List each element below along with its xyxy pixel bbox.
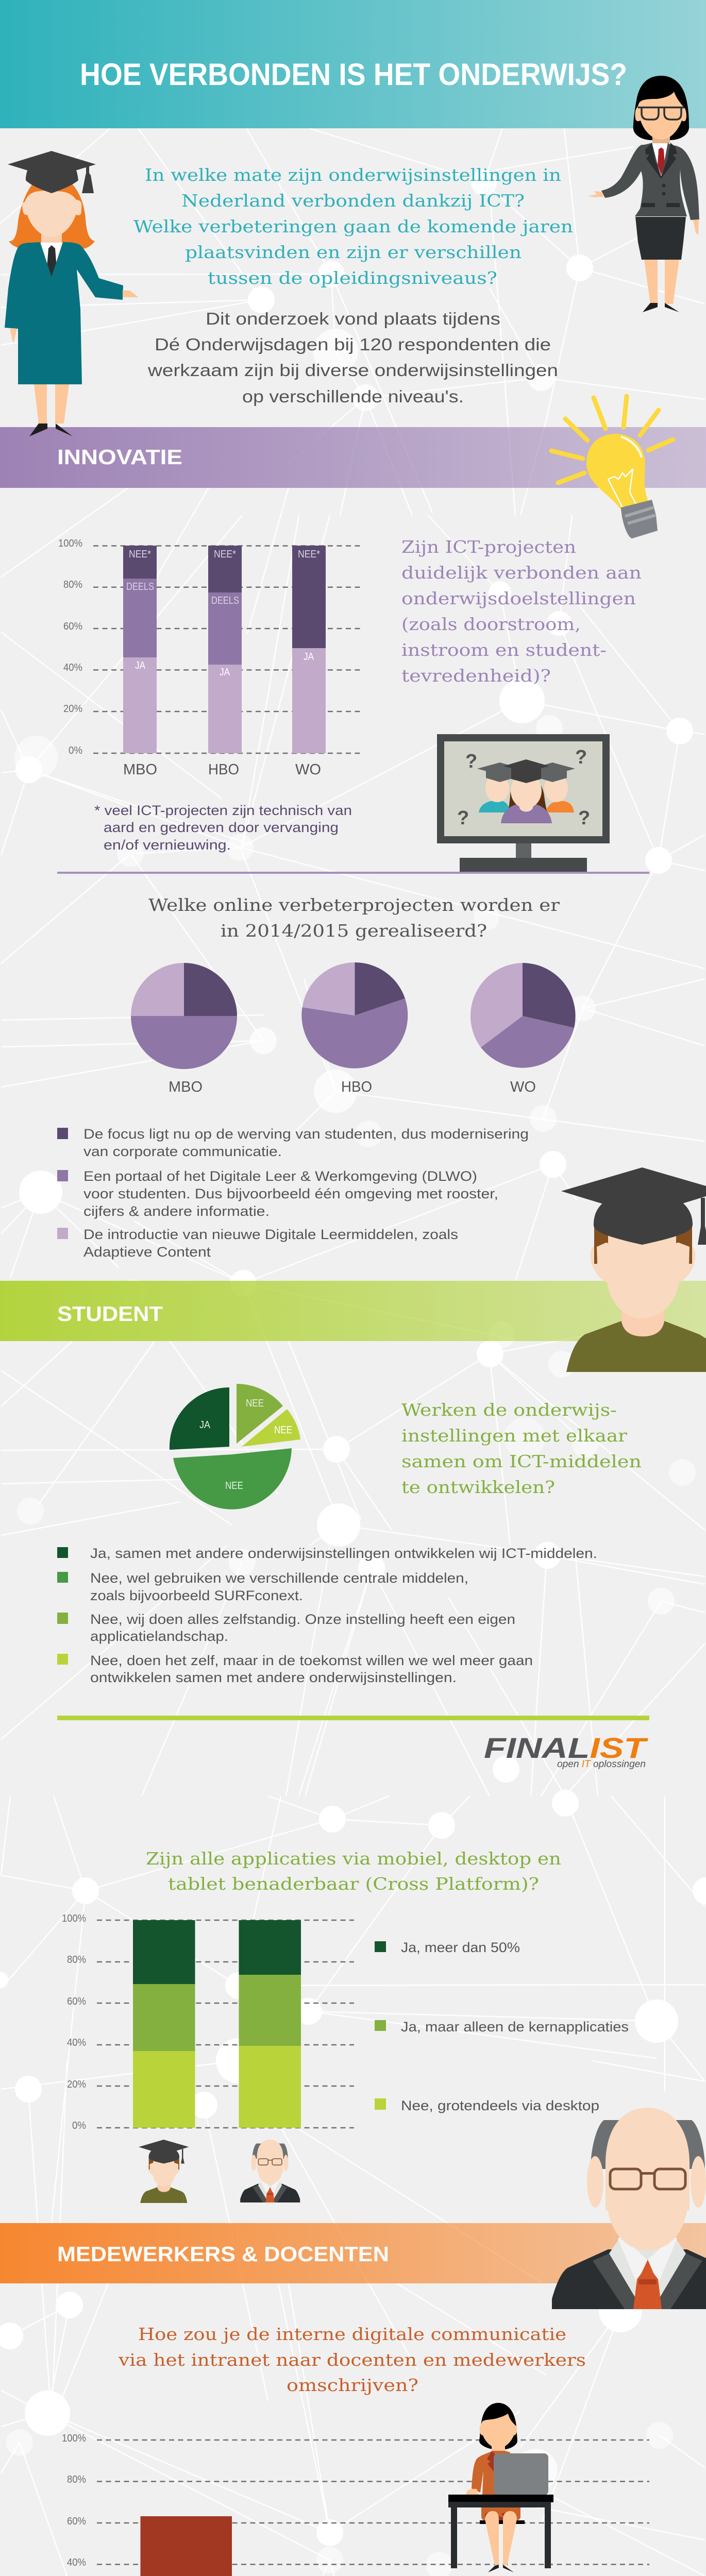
- bar chart: intranet: 80%: [67, 2474, 86, 2485]
- section band: student: STUDENT: [57, 1302, 163, 1326]
- question: intranet: Hoe zou je de interne digitale communicatie: [138, 2324, 566, 2344]
- bar chart: intranet: 60%: [67, 2516, 86, 2527]
- icon: monitor with students: ?: [578, 807, 590, 829]
- bar chart: intranet: 40%: [67, 2557, 86, 2568]
- intro description text: [147, 309, 558, 406]
- bar: WO: NEE*: [298, 549, 320, 560]
- question: cross platform: [146, 1849, 561, 1894]
- header banner: [0, 0, 706, 128]
- bar chart: ICT-projecten: MBO: [123, 761, 157, 778]
- intro question text: tussen de opleidingsniveaus?: [208, 268, 497, 288]
- bar chart: cross platform: 0%: [72, 2120, 86, 2131]
- question: samenwerking: samen om ICT-middelen: [401, 1451, 642, 1471]
- legend: verbeterprojecten: cijfers & andere informatie.: [83, 1204, 270, 1219]
- question: samenwerking: instellingen met elkaar: [401, 1426, 627, 1446]
- pie: WO: WO: [510, 1079, 536, 1095]
- bar: MBO: NEE*: [129, 549, 151, 560]
- icon: graduate woman: [5, 151, 139, 436]
- question: samenwerking: [401, 1400, 642, 1497]
- legend: samenwerking: Ja, samen met andere onderwijsinstellingen ontwikkelen wij ICT-middelen.: [90, 1546, 597, 1561]
- bar: HBO: NEE*: [214, 549, 236, 560]
- footnote: en/of vernieuwing.: [104, 837, 231, 853]
- icon: professor: [552, 2108, 706, 2309]
- bar: HBO: JA: [220, 667, 230, 678]
- legend: verbeterprojecten: De focus ligt nu op de werving van studenten, dus modernisering: [83, 1126, 529, 1142]
- section band: student: [0, 1281, 706, 1341]
- legend: cross platform: Nee, grotendeels via desktop: [401, 2098, 599, 2113]
- heading: online verbeterprojecten: in 2014/2015 gerealiseerd?: [221, 921, 487, 941]
- footnote: aard en gedreven door vervanging: [104, 820, 339, 835]
- bar chart: ICT-projecten: 60%: [63, 621, 82, 632]
- icon: woman at desk: [448, 2403, 553, 2572]
- intro description text: Dit onderzoek vond plaats tijdens: [206, 309, 500, 328]
- bar: MBO: DEELS: [126, 581, 154, 592]
- question: ICT-projecten doelstellingen: (zoals doorstroom,: [401, 614, 581, 634]
- icon: monitor with students: [437, 734, 610, 872]
- intro description text: op verschillende niveau's.: [242, 387, 464, 406]
- icon: teacher woman: [588, 76, 699, 312]
- question: ICT-projecten doelstellingen: onderwijsdoelstellingen: [401, 588, 636, 608]
- section band: medewerkers en docenten: [0, 2223, 706, 2283]
- question: intranet: via het intranet naar docenten en medewerkers: [118, 2350, 586, 2370]
- legend: verbeterprojecten: voor studenten. Dus bijvoorbeeld één omgeving met rooster,: [83, 1186, 498, 1201]
- bar: moderne DLWO: [140, 2516, 232, 2576]
- section band: innovatie: INNOVATIE: [57, 445, 182, 469]
- bar chart: cross platform: 20%: [67, 2079, 86, 2090]
- icon: monitor with students: ?: [465, 751, 477, 772]
- pie: samenwerking: NEE: [246, 1398, 264, 1409]
- pie: MBO: [131, 963, 237, 1095]
- bar chart: intranet: 100%: [62, 2433, 86, 2444]
- icon: monitor with students: ?: [457, 807, 469, 829]
- bar: WO: JA: [304, 651, 314, 663]
- bar: studenten: [133, 1920, 195, 2128]
- pie: WO: [470, 963, 576, 1095]
- bar chart: ICT-projecten: 0%: [69, 745, 82, 756]
- question: ICT-projecten doelstellingen: tevredenheid)?: [401, 666, 551, 686]
- bar: MBO: [123, 546, 157, 753]
- legend: samenwerking: applicatielandschap.: [90, 1629, 228, 1644]
- question: ICT-projecten doelstellingen: instroom en student-: [401, 640, 607, 660]
- question: ICT-projecten doelstellingen: duidelijk verbonden aan: [401, 563, 642, 583]
- bar chart: ICT-projecten: WO: [295, 761, 321, 778]
- pie: samenwerking: [170, 1384, 300, 1510]
- icon: monitor with students: ?: [575, 747, 587, 768]
- intro description text: Dé Onderwijsdagen bij 120 respondenten die: [155, 335, 551, 354]
- bar chart: ICT-projecten: 80%: [63, 579, 82, 590]
- intro description text: werkzaam zijn bij diverse onderwijsinstellingen: [147, 361, 558, 380]
- heading: online verbeterprojecten: Welke online verbeterprojecten worden er: [148, 895, 560, 915]
- intro question text: plaatsvinden en zijn er verschillen: [185, 242, 522, 262]
- legend: cross platform: Ja, maar alleen de kernapplicaties: [401, 2019, 629, 2035]
- question: samenwerking: te ontwikkelen?: [401, 1477, 555, 1497]
- bar chart: ICT-projecten: HBO: [208, 761, 239, 778]
- legend: verbeterprojecten: Een portaal of het Digitale Leer & Werkomgeving (DLWO): [83, 1168, 477, 1184]
- bar: WO: [292, 546, 326, 753]
- heading: online verbeterprojecten: [148, 895, 560, 941]
- logo: Finalist: FINAL IST: [484, 1732, 649, 1764]
- question: intranet: [118, 2324, 586, 2395]
- footnote: * veel ICT-projecten zijn technisch van: [94, 803, 352, 818]
- question: cross platform: tablet benaderbaar (Cross Platform)?: [168, 1874, 539, 1894]
- icon: student: [561, 1167, 706, 1372]
- bar chart: cross platform: [62, 1913, 354, 2131]
- title: HOE VERBONDEN IS HET ONDERWIJS?: [80, 57, 627, 92]
- icon: small professor: [240, 2140, 300, 2202]
- bar chart: cross platform: 80%: [67, 1954, 86, 1965]
- pie: HBO: [301, 962, 408, 1095]
- bar chart: ICT-projecten: 20%: [63, 703, 82, 715]
- bar chart: cross platform: 100%: [62, 1913, 86, 1924]
- bar chart: ICT-projecten: 100%: [58, 538, 82, 549]
- bar chart: intranet: [62, 2433, 649, 2576]
- legend: verbeterprojecten: Adaptieve Content: [83, 1244, 211, 1260]
- intro question text: Welke verbeteringen gaan de komende jaren: [133, 216, 573, 236]
- bar chart: ICT-projecten: [58, 538, 361, 778]
- legend: samenwerking: Nee, wij doen alles zelfstandig. Onze instelling heeft een eigen: [90, 1612, 515, 1627]
- legend: samenwerking: [57, 1546, 597, 1685]
- section band: medewerkers en docenten: MEDEWERKERS & DOCENTEN: [57, 2242, 389, 2266]
- bar: MBO: JA: [135, 660, 146, 671]
- legend: samenwerking: zoals bijvoorbeeld SURFconext.: [90, 1588, 303, 1603]
- intro question text: In welke mate zijn onderwijsinstellingen in: [145, 165, 561, 185]
- question: intranet: omschrijven?: [287, 2375, 418, 2395]
- legend: samenwerking: ontwikkelen samen met andere onderwijsinstellingen.: [90, 1670, 457, 1685]
- legend: verbeterprojecten: [57, 1126, 529, 1260]
- footnote: [94, 803, 352, 853]
- intro question text: [133, 165, 573, 288]
- icon: small student: [139, 2140, 189, 2203]
- legend: samenwerking: Nee, wel gebruiken we verschillende centrale middelen,: [90, 1570, 468, 1586]
- bar chart: cross platform: 60%: [67, 1996, 86, 2007]
- pie: samenwerking: JA: [199, 1419, 211, 1431]
- question: samenwerking: Werken de onderwijs-: [401, 1400, 617, 1420]
- legend: cross platform: [375, 1940, 629, 2113]
- intro question text: Nederland verbonden dankzij ICT?: [181, 191, 525, 211]
- bar chart: cross platform: 40%: [67, 2037, 86, 2048]
- section band: innovatie: [0, 427, 706, 488]
- bar chart: ICT-projecten: 40%: [63, 662, 82, 673]
- icon: light bulb: [551, 396, 673, 538]
- bar: HBO: DEELS: [211, 595, 239, 606]
- pie: samenwerking: NEE: [274, 1425, 292, 1436]
- pie: HBO: HBO: [341, 1079, 372, 1095]
- legend: verbeterprojecten: van corporate communicatie.: [83, 1144, 282, 1159]
- legend: verbeterprojecten: De introductie van nieuwe Digitale Leermiddelen, zoals: [83, 1227, 458, 1242]
- bar: HBO: [208, 546, 242, 753]
- pie: MBO: MBO: [169, 1079, 203, 1095]
- bar: medewerkers: [239, 1920, 301, 2128]
- legend: samenwerking: Nee, doen het zelf, maar in de toekomst willen we wel meer gaan: [90, 1653, 533, 1668]
- logo: Finalist: open IT oplossingen: [557, 1759, 646, 1770]
- question: ICT-projecten doelstellingen: Zijn ICT-projecten: [401, 537, 576, 557]
- pie: samenwerking: NEE: [225, 1480, 243, 1492]
- question: cross platform: Zijn alle applicaties via mobiel, desktop en: [146, 1849, 561, 1869]
- question: ICT-projecten doelstellingen: [401, 537, 642, 686]
- legend: cross platform: Ja, meer dan 50%: [401, 1940, 520, 1955]
